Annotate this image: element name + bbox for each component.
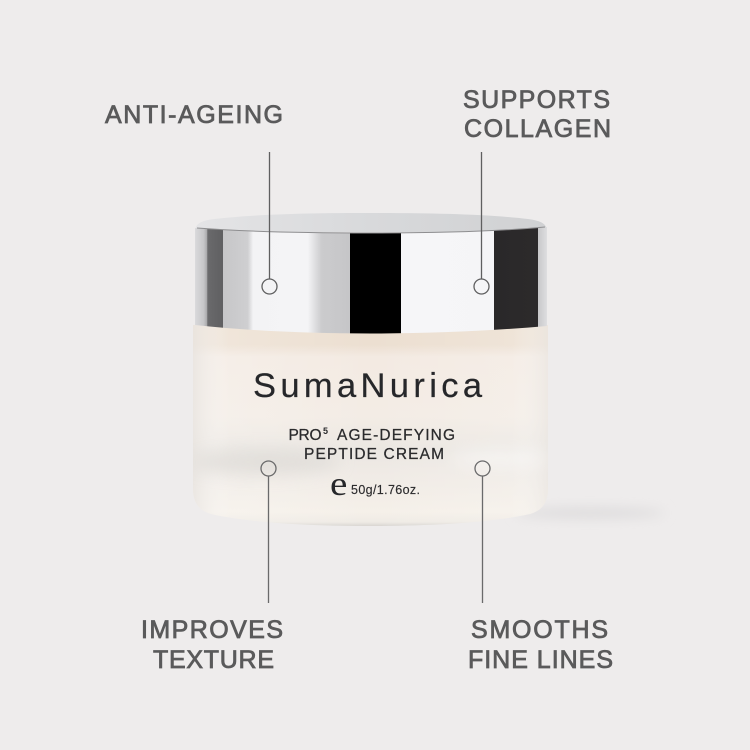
callout: supports collagen [463, 86, 611, 294]
marker [474, 279, 489, 294]
product name [288, 426, 455, 463]
cap rim highlight [197, 227, 545, 233]
label [141, 616, 283, 674]
label: SUPPORTS [463, 86, 610, 114]
product name: AGE-DEFYING [337, 427, 455, 444]
callout: improves texture [141, 461, 283, 674]
net weight: 50g/1.76oz. [351, 483, 420, 497]
callout: anti-ageing [105, 101, 283, 294]
leader line [268, 152, 270, 279]
marker [262, 279, 277, 294]
marker [261, 461, 276, 476]
product jar [190, 213, 550, 526]
leader line [268, 476, 270, 603]
label: ANTI-AGEING [105, 101, 283, 129]
leader line [482, 476, 484, 603]
leader line [480, 152, 482, 279]
label: COLLAGEN [464, 115, 611, 143]
marker [475, 461, 490, 476]
label [463, 86, 611, 143]
jar body [193, 325, 548, 526]
label: IMPROVES [141, 616, 283, 644]
callout: smooths fine lines [468, 461, 613, 674]
jar shadow [515, 508, 665, 518]
cap top [195, 213, 547, 232]
product name: PEPTIDE CREAM [304, 446, 444, 463]
brand name: SumaNurica [253, 367, 483, 405]
jar frosted shadow band [203, 452, 326, 474]
label [468, 616, 613, 674]
label: TEXTURE [153, 646, 274, 674]
product name: PRO [288, 427, 322, 444]
infographic canvas [104, 90, 640, 668]
label: SMOOTHS [471, 616, 608, 644]
product name: 5 [323, 426, 328, 436]
jar side shading [193, 325, 548, 526]
cap band [195, 227, 547, 334]
net weight [330, 464, 420, 502]
label: FINE LINES [468, 646, 613, 674]
net weight: e [330, 464, 347, 502]
